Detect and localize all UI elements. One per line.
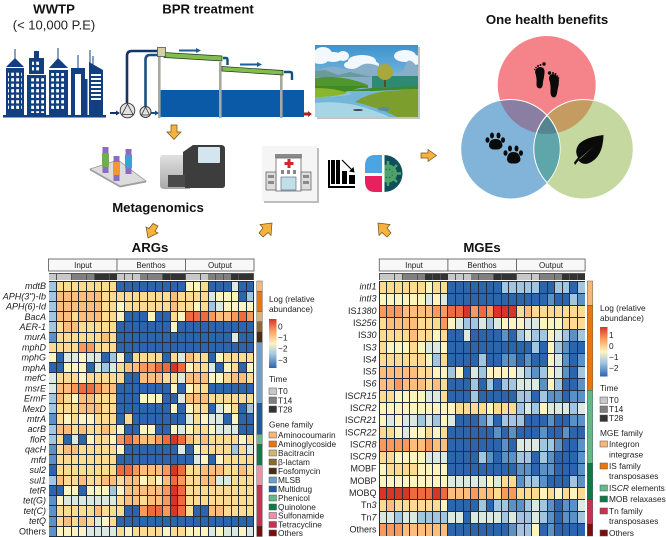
ARGs legend: β-lactam: [278, 457, 310, 467]
heading: ARGs: ARGs: [132, 240, 168, 255]
arrow: MGEs to hospital: [378, 223, 391, 237]
ARGs row labels: APH(6)-Id: [5, 302, 47, 312]
MGEs legend: MOB relaxases: [609, 494, 666, 504]
ARGs row labels: mphA: [22, 363, 46, 373]
title: One health benefits: One health benefits: [486, 12, 608, 27]
ARGs legend: Aminoglycoside: [278, 439, 336, 449]
MGEs row labels: IS256: [353, 318, 376, 328]
MGEs legend: abundance): [600, 313, 644, 323]
ARGs row labels: sul1: [29, 475, 46, 485]
ARGs row labels: sul2: [29, 465, 46, 475]
arrow: to metagenomics: [167, 125, 181, 140]
MGEs row labels: ISCR9: [350, 452, 376, 462]
MGEs row labels: MOBQ: [349, 488, 376, 498]
MGEs legend: Log (relative: [600, 303, 646, 313]
arrow: ARGs to hospital: [259, 223, 272, 237]
ARGs row labels: qacH: [25, 445, 46, 455]
ARGs row labels: [2, 281, 47, 536]
MGEs legend: 0: [609, 341, 614, 351]
ARGs legend: Aminocoumarin: [278, 430, 336, 440]
ARGs gene family annotation bar: [257, 281, 262, 536]
ARGs row labels: MexD: [22, 404, 46, 414]
icon: capsule and microbe: [365, 155, 403, 192]
diagram: BPR reactor: [110, 48, 312, 118]
ARGs legend: −2: [278, 344, 288, 354]
ARGs legend: Sulfonamide: [278, 510, 325, 520]
title: WWTP: WWTP: [33, 2, 75, 16]
icon: animal paws: [486, 132, 523, 164]
MGEs row labels: ISCR22: [345, 427, 376, 437]
ARGs row labels: mphG: [21, 353, 46, 363]
ARGs legend: 0: [278, 322, 283, 332]
ARGs row labels: tet(G): [23, 496, 46, 506]
ARGs time strip: [48, 273, 254, 280]
MGEs legend: [600, 303, 666, 537]
MGEs legend: Integron: [609, 439, 640, 449]
icon: sequencer: [160, 145, 225, 189]
MGEs sample group headers: Input: [405, 261, 424, 270]
icon: leaf: [574, 135, 604, 165]
MGEs row labels: IS4: [363, 354, 376, 364]
MGEs legend: Time: [600, 383, 619, 393]
icon: human footprints: [534, 62, 559, 98]
ARGs legend: Phenicol: [278, 493, 310, 503]
ARGs row labels: APH(3")-Ib: [2, 291, 46, 301]
MGEs row labels: IS1380: [348, 306, 376, 316]
ARGs row labels: Others: [19, 526, 46, 536]
MGEs row labels: Tn3: [361, 500, 376, 510]
ARGs sample group headers: Output: [208, 261, 233, 270]
ARGs legend: Multidrug: [278, 484, 313, 494]
ARGs sample group headers: Benthos: [136, 261, 166, 270]
ARGs row labels: floR: [30, 434, 46, 444]
MGEs sample group headers: [379, 259, 585, 271]
heading: Metagenomics: Metagenomics: [112, 200, 204, 215]
MGEs legend: T28: [609, 413, 624, 423]
icon: city buildings: [3, 48, 106, 118]
ARGs legend: Log (relative: [269, 294, 315, 304]
MGEs legend: Tn family: [609, 506, 644, 516]
MGEs row labels: intI3: [359, 294, 376, 304]
ARGs row labels: mtrA: [27, 414, 46, 424]
MGEs legend: integrase: [609, 450, 644, 460]
MGEs row labels: MOBP: [350, 476, 376, 486]
MGEs row labels: IS6: [363, 379, 376, 389]
ARGs row labels: ErmF: [24, 394, 46, 404]
MGEs legend: 1: [609, 330, 614, 340]
MGEs sample group headers: Output: [539, 261, 564, 270]
ARGs legend: T0: [278, 386, 288, 396]
MGEs legend: T0: [609, 395, 619, 405]
MGEs time strip: [379, 273, 585, 280]
ARGs row labels: mefC: [24, 373, 46, 383]
MGEs legend: transposases: [609, 471, 658, 481]
MGEs row labels: Tn7: [361, 512, 377, 522]
heading: MGEs: MGEs: [463, 240, 501, 255]
ARGs legend: Quinolone: [278, 502, 316, 512]
ARGs legend: [269, 294, 336, 537]
image: river landscape: [312, 45, 422, 118]
ARGs legend: Bacitracin: [278, 448, 315, 458]
ARGs legend: abundance): [269, 304, 313, 314]
ARGs row labels: mphD: [22, 342, 46, 352]
ARGs legend: Fosfomycin: [278, 466, 321, 476]
MGEs row labels: ISCR8: [350, 439, 376, 449]
ARGs sample group headers: Input: [74, 261, 93, 270]
MGEs row labels: ISCR2: [350, 403, 376, 413]
ARGs legend: −1: [278, 332, 288, 342]
MGEs sample group headers: Benthos: [467, 261, 497, 270]
diagram: one health venn: [461, 36, 633, 198]
title: BPR treatment: BPR treatment: [162, 2, 254, 16]
MGEs row labels: MOBF: [350, 464, 377, 474]
MGEs row labels: IS30: [358, 330, 376, 340]
ARGs row labels: tetR: [29, 486, 46, 496]
arrow: to one health benefits: [421, 150, 436, 162]
ARGs row labels: AER-1: [18, 322, 46, 332]
MGEs legend: −1: [609, 352, 619, 362]
MGEs heatmap: [379, 281, 585, 536]
subtitle: population equivalent: (< 10,000 P.E): [13, 18, 95, 32]
ARGs legend: Tetracycline: [278, 520, 322, 530]
MGEs legend: ISCR elements: [609, 483, 665, 493]
ARGs row labels: msrE: [25, 383, 47, 393]
ARGs legend: Time: [269, 374, 288, 384]
MGEs legend: MGE family: [600, 428, 644, 438]
ARGs row labels: tetQ: [29, 516, 46, 526]
ARGs row labels: mfd: [31, 455, 47, 465]
MGEs row labels: ISCR15: [345, 391, 377, 401]
MGEs row labels: IS3: [363, 342, 376, 352]
MGEs row labels: Others: [349, 524, 377, 534]
icon: flow cell chip: [90, 147, 146, 188]
MGEs row labels: [345, 282, 377, 534]
icon: declining bar chart: [328, 160, 355, 188]
MGEs row labels: IS5: [363, 366, 377, 376]
ARGs row labels: tet(C): [24, 506, 46, 516]
MGEs legend: IS family: [609, 461, 642, 471]
MGEs legend: transposases: [609, 516, 658, 526]
MGEs legend: −2: [609, 363, 619, 373]
ARGs sample group headers: [48, 259, 254, 271]
ARGs row labels: mdtB: [25, 281, 46, 291]
MGEs row labels: intI1: [359, 282, 376, 292]
ARGs row labels: acrB: [27, 424, 46, 434]
ARGs legend: MLSB: [278, 475, 301, 485]
image shadow: landscape: [317, 47, 420, 119]
MGEs legend: T14: [609, 404, 624, 414]
ARGs legend: T28: [278, 404, 293, 414]
ARGs legend: Gene family: [269, 420, 314, 430]
ARGs legend: T14: [278, 396, 293, 406]
ARGs heatmap: [48, 281, 254, 536]
ARGs legend: −3: [278, 355, 288, 365]
ARGs row labels: murA: [24, 332, 46, 342]
arrow: metagenomics to ARGs: [146, 224, 158, 238]
icon: hospital card: [262, 146, 319, 203]
MGEs row labels: ISCR21: [345, 415, 376, 425]
MGEs family annotation bar: [587, 281, 593, 536]
ARGs row labels: BacA: [24, 312, 46, 322]
